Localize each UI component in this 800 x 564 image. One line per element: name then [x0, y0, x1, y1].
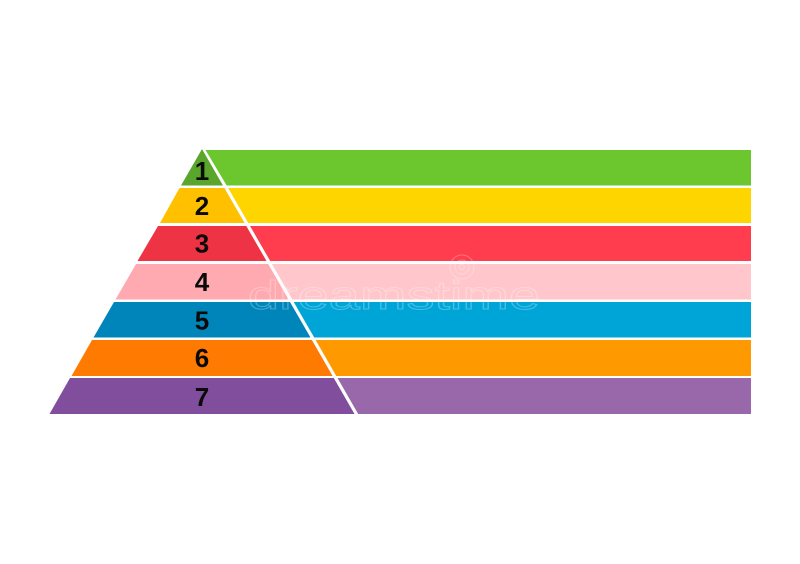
- row 3: red tier and bar: 3: [195, 228, 209, 258]
- row 5: blue tier and bar: 5: [195, 306, 209, 336]
- row 1: green tier and bar: 1: [195, 156, 209, 186]
- watermark: dreamstime: [248, 274, 540, 318]
- row 6: orange tier and bar: 6: [195, 343, 209, 373]
- pyramid chart with seven numbered tiers and matching bars: [50, 149, 751, 414]
- row 4: pink tier and bar: [116, 264, 751, 300]
- row 7: purple tier and bar: [50, 378, 751, 414]
- row 7: purple tier and bar: 7: [195, 382, 209, 412]
- row 3: red tier and bar: [138, 226, 751, 261]
- row 5: blue tier and bar: [94, 302, 751, 338]
- row 2: yellow tier and bar: [160, 188, 751, 223]
- row 6: orange tier and bar: [72, 340, 751, 376]
- row 1: green tier and bar: [181, 149, 751, 186]
- row 2: yellow tier and bar: 2: [195, 191, 209, 221]
- watermark: [248, 255, 540, 318]
- row 4: pink tier and bar: 4: [195, 267, 210, 297]
